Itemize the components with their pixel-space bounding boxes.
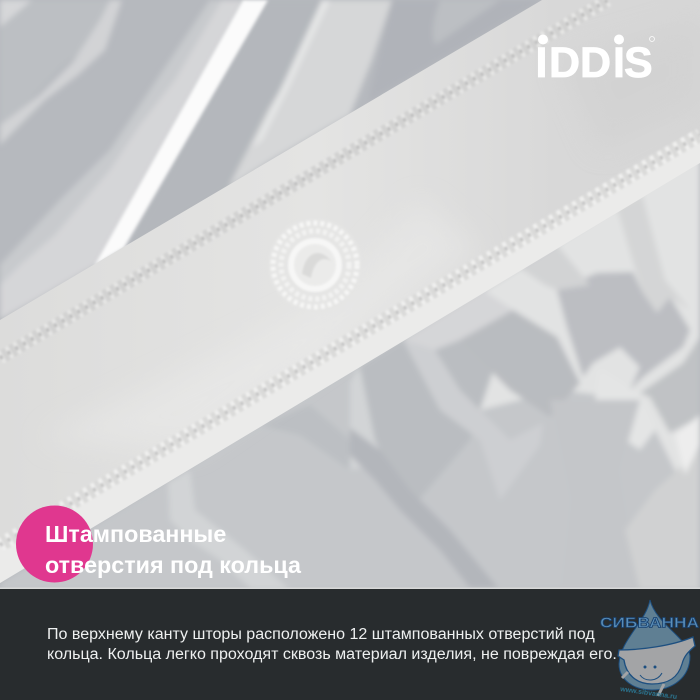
description text: кольца. Кольца легко проходят сквозь материал изделия, не повреждая его. bbox=[47, 645, 617, 663]
heading: отверстия под кольца bbox=[45, 552, 301, 578]
bright streak bbox=[94, 0, 268, 266]
icon: bathtub bbox=[618, 637, 695, 696]
stamped ring hole bbox=[268, 218, 362, 312]
heading: Штампованные bbox=[45, 521, 226, 547]
panel: dark description bbox=[0, 589, 700, 700]
logo: IDDIS: IDDIS bbox=[536, 39, 653, 87]
lower hem strip bbox=[0, 135, 700, 583]
icon: water drop bbox=[619, 600, 690, 690]
stitching lines bbox=[0, 0, 700, 545]
upper-left transparent area waves bbox=[0, 0, 542, 320]
description text: По верхнему канту шторы расположено 12 штампованных отверстий под bbox=[47, 625, 595, 643]
brand name: СИБВАННА bbox=[600, 614, 699, 632]
description text bbox=[47, 625, 617, 663]
heading bbox=[45, 521, 302, 578]
lower transparent area bbox=[0, 150, 700, 590]
